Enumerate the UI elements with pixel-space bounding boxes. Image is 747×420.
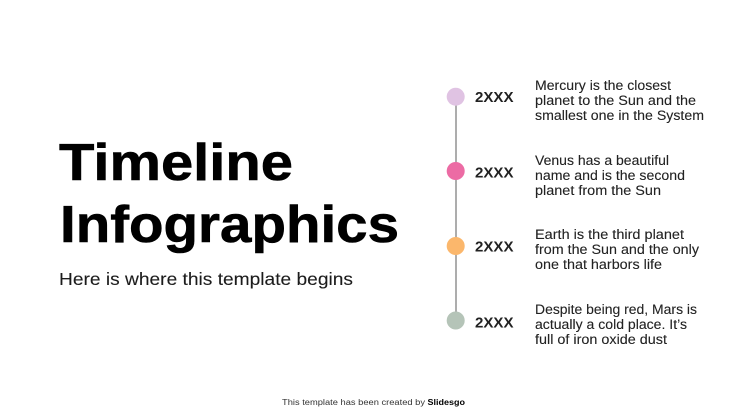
- year 1: 2XXX: [475, 90, 514, 106]
- marker 1: [447, 88, 465, 106]
- description 4: full of iron oxide dust: [535, 332, 667, 347]
- title: [59, 134, 399, 254]
- title: Timeline: [59, 134, 293, 192]
- description 3: [535, 227, 699, 272]
- description 2: planet from the Sun: [535, 183, 661, 198]
- milestone 3: [447, 227, 699, 272]
- description 4: Despite being red, Mars is: [535, 302, 697, 317]
- subtitle: Here is where this template begins: [59, 269, 353, 289]
- description 1: [535, 78, 704, 123]
- description 3: from the Sun and the only: [535, 242, 699, 257]
- footer credit: Slidesgo: [428, 398, 465, 407]
- title: Infographics: [60, 196, 399, 254]
- description 2: name and is the second: [535, 168, 685, 183]
- milestone 4: [447, 302, 697, 347]
- marker 3: [447, 237, 465, 255]
- description 1: Mercury is the closest: [535, 78, 671, 93]
- marker 2: [447, 162, 465, 180]
- description 4: actually a cold place. It’s: [535, 317, 687, 332]
- milestone 1: [447, 78, 704, 123]
- footer credit: This template has been created by: [282, 398, 425, 407]
- timeline: [447, 78, 704, 347]
- description 3: Earth is the third planet: [535, 227, 684, 242]
- marker 4: [447, 312, 465, 330]
- description 3: one that harbors life: [535, 257, 662, 272]
- timeline line: [455, 97, 457, 321]
- year 4: 2XXX: [475, 316, 514, 332]
- description 1: planet to the Sun and the: [535, 93, 696, 108]
- description 2: Venus has a beautiful: [535, 153, 669, 168]
- year 2: 2XXX: [475, 166, 514, 182]
- milestone 2: [447, 153, 685, 198]
- description 4: [535, 302, 697, 347]
- footer credit: [282, 398, 465, 407]
- description 2: [535, 153, 685, 198]
- description 1: smallest one in the System: [535, 108, 704, 123]
- year 3: 2XXX: [475, 240, 514, 256]
